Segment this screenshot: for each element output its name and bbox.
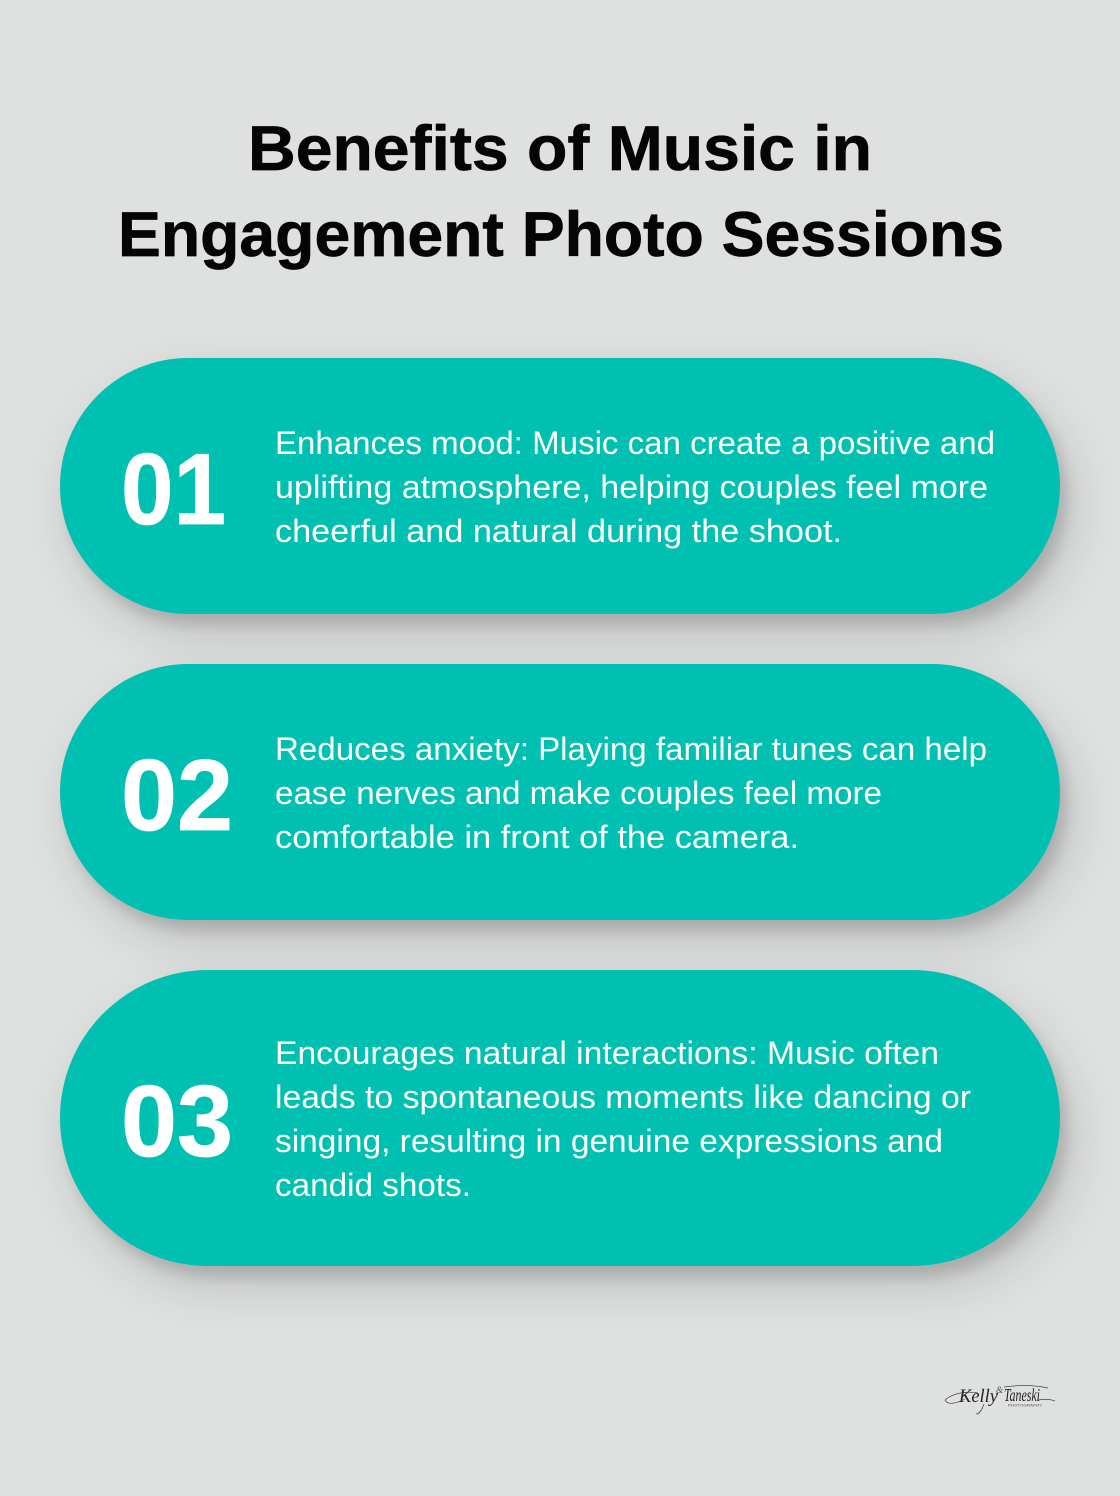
- number 02: 02: [121, 740, 233, 852]
- text block 03: leads to spontaneous moments like dancing or: [275, 1079, 971, 1115]
- panel: card 01 background: [60, 358, 1060, 614]
- logo: Kelly & Taneski Photography signature: Kelly: [958, 1386, 999, 1407]
- text block 03: singing, resulting in genuine expressions and: [275, 1123, 943, 1159]
- text block 02: comfortable in front of the camera.: [275, 819, 799, 855]
- logo: Kelly & Taneski Photography signature: Taneski: [1004, 1385, 1040, 1405]
- number 01: 01: [121, 434, 226, 546]
- logo: Kelly & Taneski Photography signature: &: [996, 1385, 1003, 1395]
- text block 02: Reduces anxiety: Playing familiar tunes can help: [275, 731, 987, 767]
- text block 03: Encourages natural interactions: Music often: [275, 1035, 939, 1071]
- logo: Kelly & Taneski Photography signature: [945, 1385, 1055, 1414]
- panel: card 03 background: [60, 970, 1060, 1266]
- text block 01: cheerful and natural during the shoot.: [275, 513, 842, 549]
- title: Engagement Photo Sessions: [118, 200, 1004, 270]
- text block 02: [275, 731, 987, 855]
- text block 01: uplifting atmosphere, helping couples feel more: [275, 469, 988, 505]
- panel: card 02 background: [60, 664, 1060, 920]
- text block 01: Enhances mood: Music can create a positive and: [275, 425, 995, 461]
- title: [118, 114, 1004, 270]
- text block 03: candid shots.: [275, 1167, 471, 1203]
- number 03: 03: [121, 1066, 233, 1178]
- text block 01: [275, 425, 995, 549]
- title: Benefits of Music in: [248, 114, 872, 184]
- text block 03: [275, 1035, 971, 1203]
- text block 02: ease nerves and make couples feel more: [275, 775, 882, 811]
- logo: Kelly & Taneski Photography signature: PHOTOGRAPHY: [1008, 1404, 1043, 1408]
